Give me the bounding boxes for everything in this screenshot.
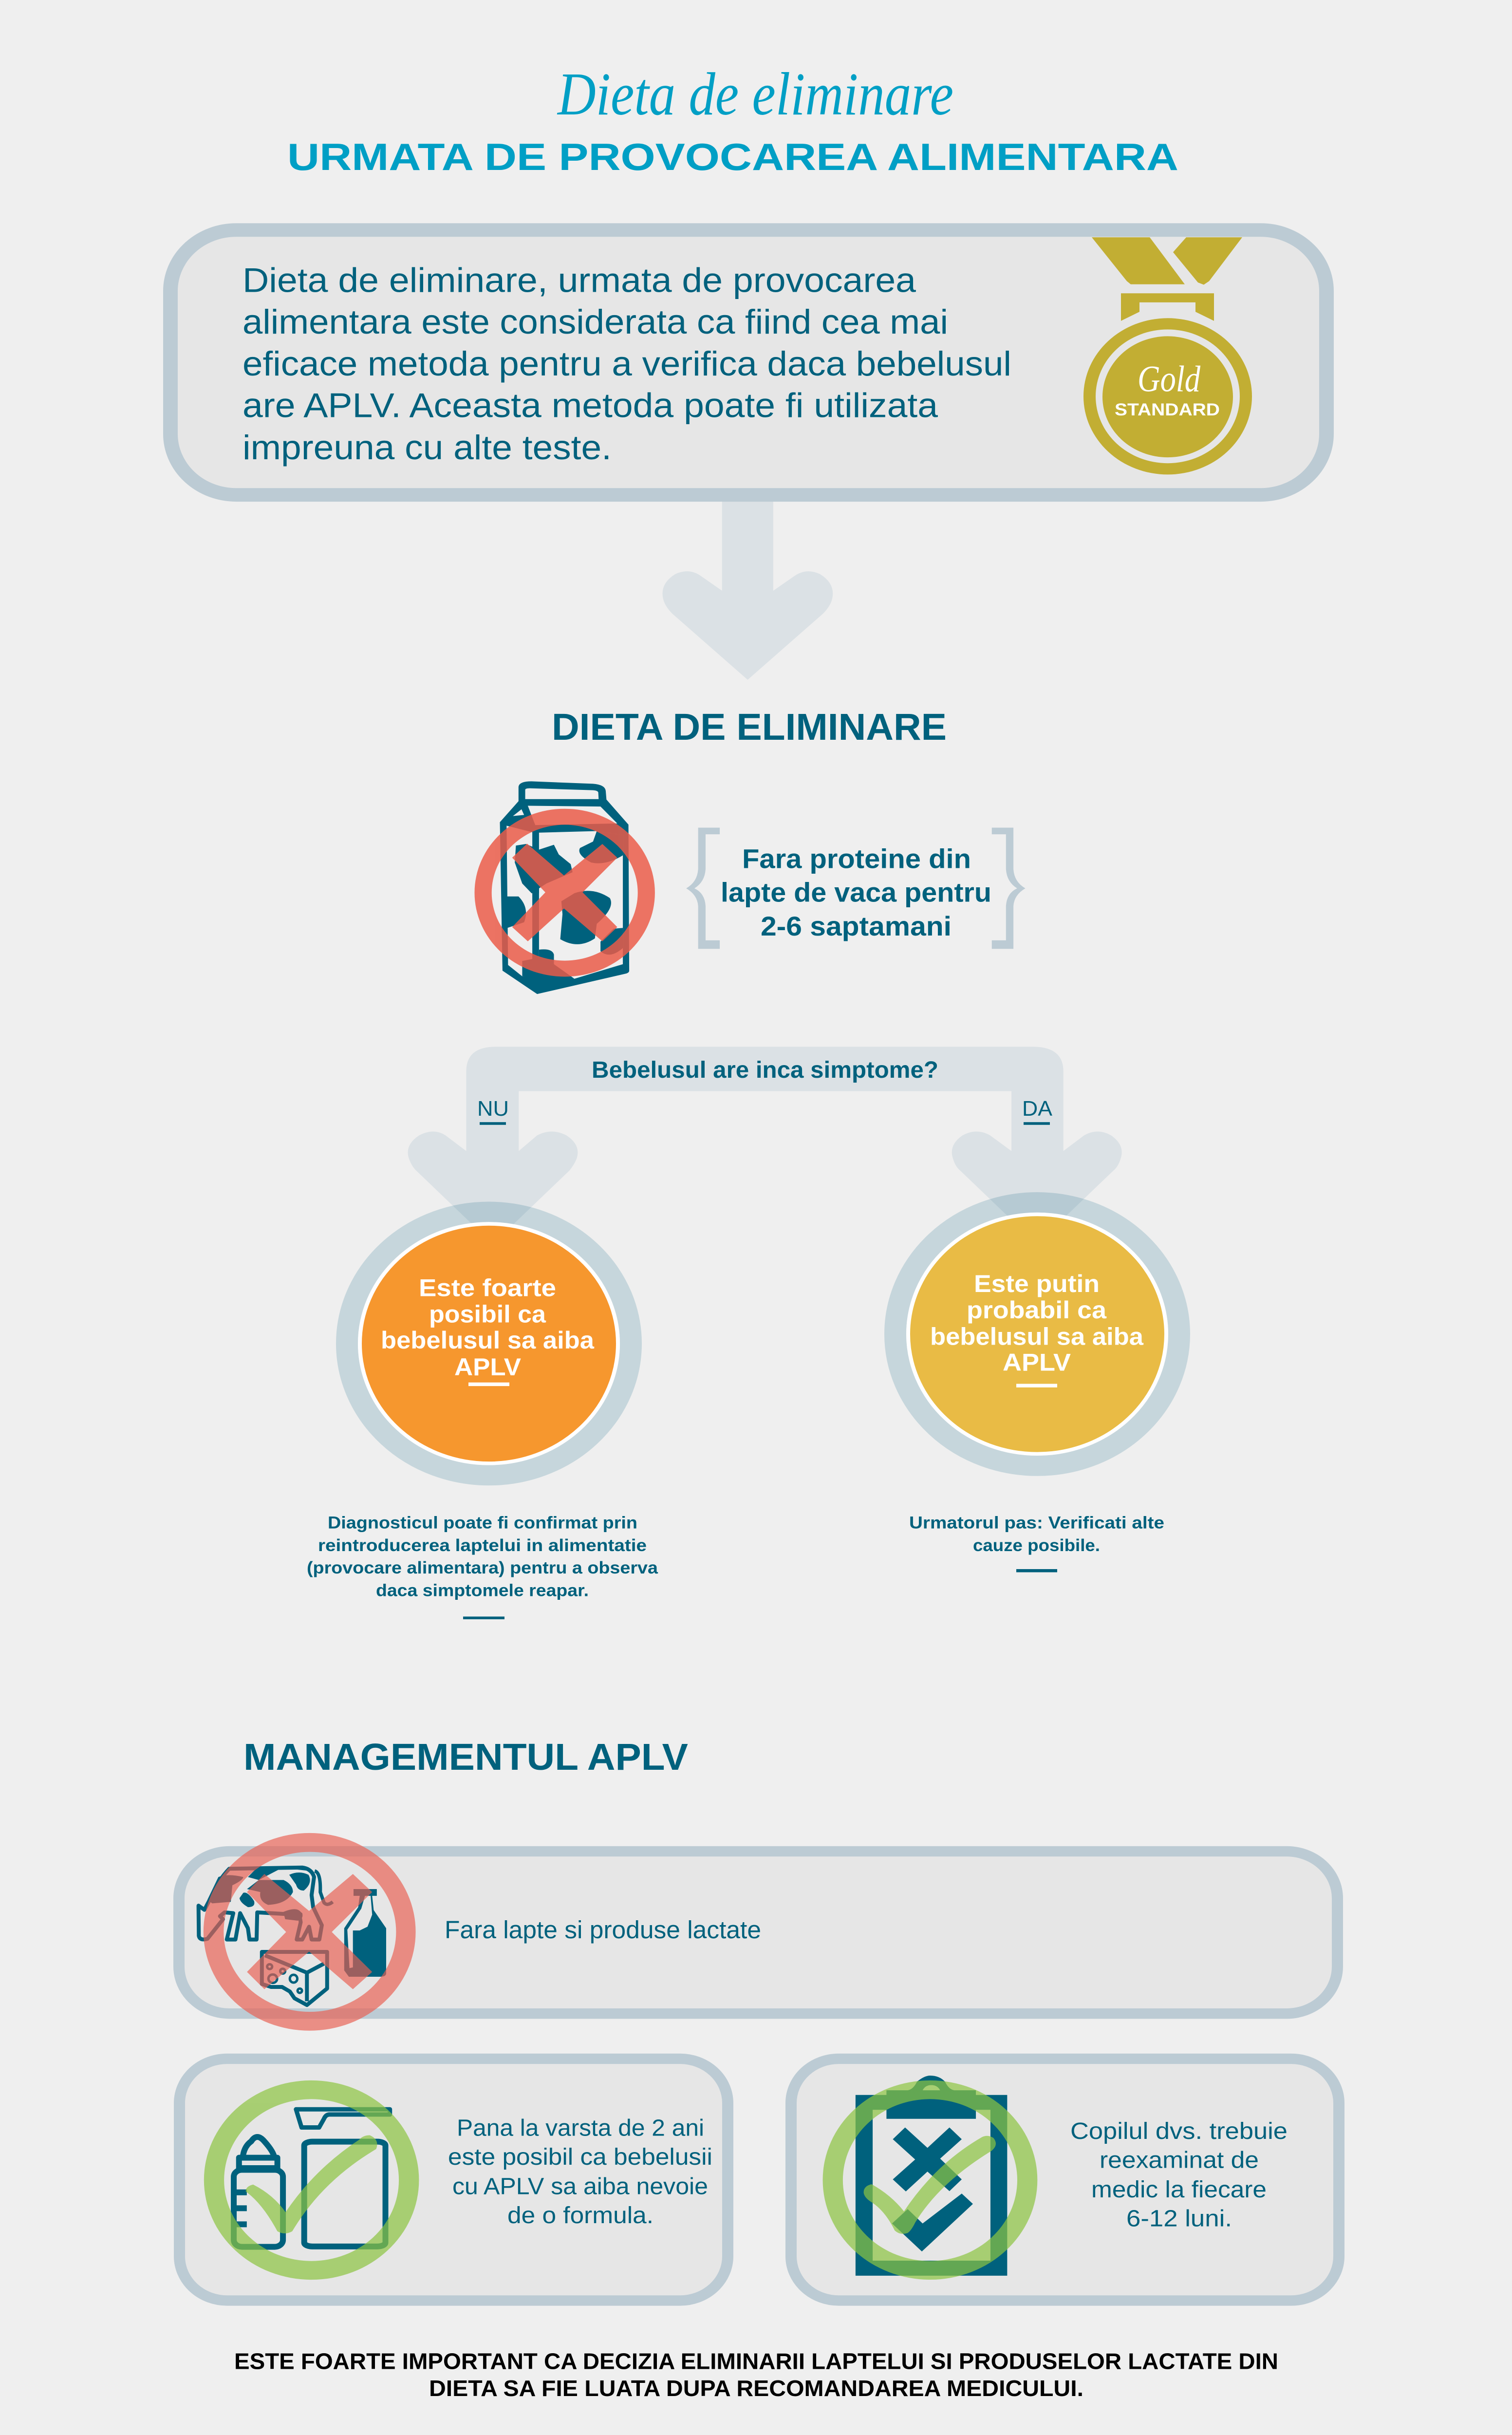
- cheese: [262, 1952, 327, 2005]
- note: next step: Urmatorul pas: Verificati alte: [909, 1513, 1164, 1532]
- note: diagnosis confirmation: (provocare alimentara) pentru a observa: [307, 1558, 658, 1577]
- panel text: [448, 2115, 712, 2228]
- panel text: cu APLV sa aiba nevoie: [452, 2173, 708, 2199]
- note: next step: cauze posibile.: [973, 1536, 1100, 1555]
- panel text: [1070, 2118, 1288, 2231]
- title bold line: URMATA DE PROVOCAREA ALIMENTARA: [287, 136, 1178, 178]
- icon: clipboard with check: [823, 2076, 1037, 2280]
- label: NU: NU: [477, 1097, 509, 1121]
- left bracket: [686, 828, 720, 949]
- panel frame: [179, 1852, 1337, 2014]
- panel text: este posibil ca bebelusii: [448, 2144, 712, 2170]
- outcome circle: unlikely: bebelusul sa aiba: [930, 1323, 1144, 1350]
- panel text: de o formula.: [507, 2202, 653, 2228]
- icon: gold standard medal: [1083, 237, 1252, 474]
- bottle: [344, 1889, 386, 1977]
- green check mark: [204, 2080, 419, 2280]
- panel: medical re-examination: [791, 2059, 1339, 2301]
- footer note: DIETA SA FIE LUATA DUPA RECOMANDAREA MEDICULUI.: [429, 2376, 1083, 2401]
- flow arrows: yes and no branches: [408, 1047, 1122, 1244]
- bracket text: lapte de vaca pentru: [721, 878, 991, 908]
- panel text: Fara lapte si produse lactate: [445, 1916, 761, 1944]
- footer note: [234, 2349, 1278, 2401]
- note: diagnosis confirmation: daca simptomele reapar.: [376, 1581, 589, 1600]
- outcome circle: very likely: bebelusul sa aiba: [381, 1327, 595, 1354]
- bracket text: 2-6 saptamani: [761, 912, 952, 941]
- icon: gold standard medal: STANDARD: [1115, 400, 1220, 419]
- bracket text: Fara proteine din: [742, 844, 971, 874]
- outcome circle: unlikely: [895, 1202, 1179, 1466]
- question text: Bebelusul are inca simptome?: [592, 1057, 938, 1083]
- note: next step: [909, 1513, 1164, 1572]
- intro text: [243, 261, 1011, 467]
- outcome circle: unlikely: probabil ca: [967, 1297, 1107, 1324]
- outcome circle: very likely: [347, 1212, 631, 1475]
- panel text: medic la fiecare: [1091, 2176, 1267, 2202]
- formula tin: [304, 2142, 386, 2247]
- panel text: Pana la varsta de 2 ani: [457, 2115, 704, 2141]
- note: diagnosis confirmation: Diagnosticul poate fi confirmat prin: [328, 1513, 637, 1532]
- outcome circle: unlikely: APLV: [1003, 1349, 1071, 1376]
- heading: managementul APLV: MANAGEMENTUL APLV: [243, 1736, 688, 1778]
- bottle: [234, 2137, 283, 2247]
- bracket text: [721, 844, 991, 941]
- icon: cow, bottle and cheese crossed out: [199, 1833, 416, 2031]
- right bracket: [992, 828, 1026, 949]
- label: DA: DA: [1022, 1097, 1053, 1121]
- icon: milk carton crossed out: [474, 781, 655, 994]
- text with curly brackets: no milk protein: [686, 828, 1026, 949]
- title: [287, 60, 1178, 178]
- scoop: [296, 2109, 390, 2128]
- red cross mark: [204, 1833, 416, 2031]
- cow: [199, 1868, 333, 1940]
- note: diagnosis confirmation: reintroducerea laptelui in alimentatie: [318, 1536, 647, 1555]
- intro text: impreuna cu alte teste.: [243, 428, 612, 467]
- outcome circle: very likely: Este foarte: [419, 1274, 556, 1302]
- panel frame: [179, 2059, 728, 2301]
- intro box frame: [170, 230, 1326, 495]
- panel: no milk and dairy: [179, 1833, 1337, 2031]
- icon: baby bottle and formula tin with check: [204, 2080, 419, 2280]
- intro text: are APLV. Aceasta metoda poate fi utilizata: [243, 386, 938, 425]
- outcome circle: unlikely: Este putin: [974, 1271, 1100, 1298]
- intro text: eficace metoda pentru a verifica daca bebelusul: [243, 345, 1011, 383]
- arrow: intro to elimination diet: [663, 501, 833, 680]
- heading: dieta de eliminare: DIETA DE ELIMINARE: [552, 706, 947, 748]
- panel: formula: [179, 2059, 728, 2301]
- intro text: Dieta de eliminare, urmata de provocarea: [243, 261, 916, 300]
- green check mark: [823, 2080, 1037, 2280]
- panel frame: [791, 2059, 1339, 2301]
- outcome circle: very likely: APLV: [454, 1354, 521, 1381]
- panel text: 6-12 luni.: [1126, 2205, 1232, 2231]
- icon: gold standard medal: Gold: [1138, 359, 1200, 400]
- red cross mark: [474, 809, 655, 976]
- outcome circle: very likely: posibil ca: [429, 1301, 546, 1328]
- panel text: reexaminat de: [1100, 2147, 1259, 2173]
- panel: intro box: [170, 230, 1326, 495]
- footer note: ESTE FOARTE IMPORTANT CA DECIZIA ELIMINARII LAPTELUI SI PRODUSELOR LACTATE DIN: [234, 2349, 1278, 2374]
- note: diagnosis confirmation: [307, 1513, 658, 1619]
- title script line: Dieta de eliminare: [557, 60, 953, 128]
- panel text: Copilul dvs. trebuie: [1070, 2118, 1288, 2144]
- intro text: alimentara este considerata ca fiind cea mai: [243, 302, 948, 341]
